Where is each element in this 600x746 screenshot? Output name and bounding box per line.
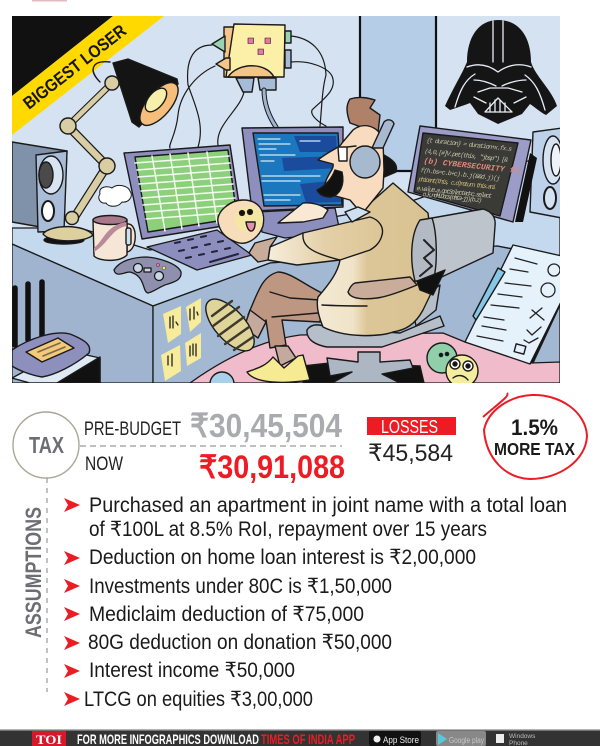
right speaker [530, 128, 563, 218]
pre-budget tax amount: ₹30,45,504 [190, 407, 343, 444]
sticky notes [161, 298, 201, 381]
item: apartment loan: Purchased an apartment in joint name with a total loan [89, 494, 567, 517]
biggest loser corner banner: BIGGEST LOSER [19, 20, 130, 113]
right monitor: cybersecurity code: (4,0,[#]V.pet(this, "jbsp") [& [423, 148, 509, 164]
tax comparison dashed divider [80, 445, 342, 447]
item: 80G donation: 80G deduction on donation ₹50,000 [88, 631, 392, 654]
item: apartment loan: of ₹100L at 8.5% RoI, repayment over 15 years [89, 518, 487, 541]
laptop keyboard [147, 230, 252, 270]
clipboard with notes and pen [465, 245, 562, 364]
right monitor: cybersecurity code: f(h.bs=c.b+c).b.j(&&d.j)(j [419, 167, 501, 182]
assumptions vertical label: ASSUMPTIONS [21, 507, 46, 638]
emoji balls on floor [209, 342, 479, 383]
losses amount: ₹45,584 [368, 440, 453, 467]
man's torso and arm [249, 183, 436, 336]
item: mediclaim: Mediclaim deduction of ₹75,000 [89, 603, 364, 626]
game controller [114, 257, 181, 293]
losses box: LOSSES [381, 417, 438, 437]
biggest loser corner banner [12, 16, 164, 135]
item: LTCG: LTCG on equities ₹3,00,000 [84, 688, 313, 711]
footer bar [0, 729, 600, 746]
windows phone badge [496, 733, 536, 746]
google play badge: Google play [449, 735, 485, 745]
middle monitor: code [242, 127, 343, 211]
desk front faces [12, 244, 560, 383]
assumptions dashed rule [46, 478, 48, 692]
right monitor: cybersecurity code: {t duration} = duration+x.fx.s [425, 137, 513, 153]
darth vader mask [445, 20, 557, 124]
tax circle [13, 412, 79, 478]
left speaker [12, 142, 67, 232]
pink floor [190, 333, 560, 383]
tax circle: TAX [29, 432, 65, 458]
cables [170, 36, 333, 148]
monitor stand base [258, 208, 340, 238]
man's legs and shoes [197, 272, 322, 382]
right monitor: cybersecurity code: phicent(this, c.d)return this.ani [417, 176, 497, 191]
app store badge: App Store [383, 735, 419, 745]
now label: NOW [85, 454, 123, 475]
callout: 1.5% more tax: 1.5% [511, 415, 558, 440]
left monitor: spreadsheet [124, 145, 242, 239]
steam puff [99, 185, 131, 206]
app store badge [369, 731, 421, 746]
desk top surface [12, 150, 560, 306]
man's head with glasses, beard and headphones [317, 97, 397, 222]
pre-budget label: PRE-BUDGET [84, 419, 181, 440]
current tax amount: ₹30,91,088 [199, 449, 345, 485]
item: apartment loan [64, 494, 567, 541]
icon: wall mounted router box with sad face [212, 24, 291, 92]
stress ball face in hand [218, 200, 264, 243]
wifi router [12, 282, 100, 383]
right monitor: cybersecurity code: o.k.noMLDocs(data-jj)(b.z) [421, 191, 483, 204]
assumptions list [64, 494, 567, 711]
windows phone badge: Windows [509, 733, 536, 740]
callout: 1.5% more tax [483, 393, 587, 479]
pointing hand [278, 203, 328, 223]
office chair base [303, 285, 444, 383]
callout: 1.5% more tax: MORE TAX [494, 439, 575, 459]
office chair back [412, 209, 495, 295]
wall pillar [360, 16, 436, 171]
illustration: gamer at desk [12, 16, 563, 396]
item: 80C investments: Investments under 80C is ₹1,50,000 [89, 575, 392, 598]
right monitor: cybersecurity code: e.value.a.optSelected=c.select [415, 185, 493, 200]
TOI logo [32, 731, 66, 746]
right monitor: cybersecurity code: (b) CYBERSECURITY fn. [422, 157, 525, 176]
item: home loan deduction: Deduction on home loan interest is ₹2,00,000 [89, 546, 476, 569]
google play badge [436, 731, 486, 746]
item: interest income: Interest income ₹50,000 [89, 659, 295, 682]
right monitor: cybersecurity code [408, 126, 531, 222]
coffee mug [93, 216, 135, 260]
desk lamp [43, 59, 185, 244]
